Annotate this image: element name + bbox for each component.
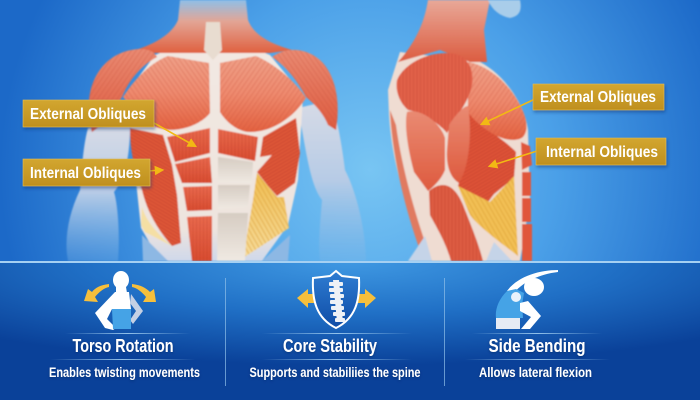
neck and trapezius	[135, 0, 292, 53]
left pectoral	[123, 56, 210, 130]
box	[533, 84, 664, 110]
side neck	[398, 0, 490, 62]
label: external obliques right	[482, 84, 664, 124]
text: Internal Obliques	[30, 165, 141, 182]
column: core stability	[250, 271, 421, 380]
forearm	[429, 185, 483, 261]
column: torso rotation	[49, 271, 200, 380]
left deltoid	[88, 49, 157, 132]
label: internal obliques left	[23, 159, 162, 186]
biceps	[447, 106, 470, 183]
description: Enables twisting movements	[49, 365, 200, 380]
deltoid	[396, 53, 472, 133]
arrow	[148, 170, 162, 171]
heading: Torso Rotation	[72, 336, 174, 356]
bottom rule	[262, 359, 412, 360]
upper arm	[406, 111, 445, 191]
right yellow fascia	[243, 173, 289, 258]
box	[23, 159, 150, 186]
description: Allows lateral flexion	[479, 365, 592, 380]
icon: side bending figure	[496, 270, 558, 329]
label: external obliques left	[23, 100, 195, 146]
heading: Core Stability	[283, 336, 377, 356]
label: internal obliques right	[490, 138, 666, 166]
bottom panel	[0, 261, 700, 400]
right deltoid	[272, 50, 338, 130]
left oblique	[130, 128, 181, 246]
side oblique	[458, 108, 516, 202]
figure: side view torso muscles	[388, 0, 532, 261]
lower fade	[408, 236, 512, 261]
right oblique	[257, 118, 300, 196]
top rule	[65, 333, 190, 334]
top background	[0, 0, 700, 263]
icon: shield with spine	[297, 271, 376, 328]
back edge muscle	[390, 110, 432, 261]
left arm	[66, 125, 130, 261]
right arm	[298, 100, 366, 261]
figure: front view torso muscles	[66, 0, 366, 261]
text: External Obliques	[30, 106, 146, 123]
right pectoral	[220, 56, 306, 132]
chest muscle	[468, 62, 527, 140]
description: Supports and stabiliies the spine	[250, 365, 421, 380]
abdominal segments	[167, 128, 258, 261]
side throat	[488, 0, 521, 18]
panel background	[0, 262, 700, 400]
bottom rule	[50, 359, 195, 360]
top rule	[472, 333, 602, 334]
arrow	[154, 123, 195, 146]
heading: Side Bending	[488, 336, 586, 356]
neck cartilage	[204, 22, 222, 60]
arrow	[490, 151, 537, 166]
column: side bending	[465, 270, 610, 380]
box	[23, 100, 154, 127]
text: External Obliques	[540, 89, 656, 106]
torso base	[125, 45, 303, 261]
box	[536, 138, 666, 165]
waist band	[142, 235, 290, 261]
icon: torso rotation figure	[84, 271, 156, 330]
arrow	[482, 99, 535, 124]
back pale body	[388, 52, 530, 261]
left yellow fascia	[141, 207, 172, 246]
side yellow fascia	[458, 176, 518, 256]
front ab strip	[521, 142, 532, 261]
bottom rule	[465, 359, 610, 360]
top rule	[262, 333, 412, 334]
text: Internal Obliques	[546, 144, 658, 161]
